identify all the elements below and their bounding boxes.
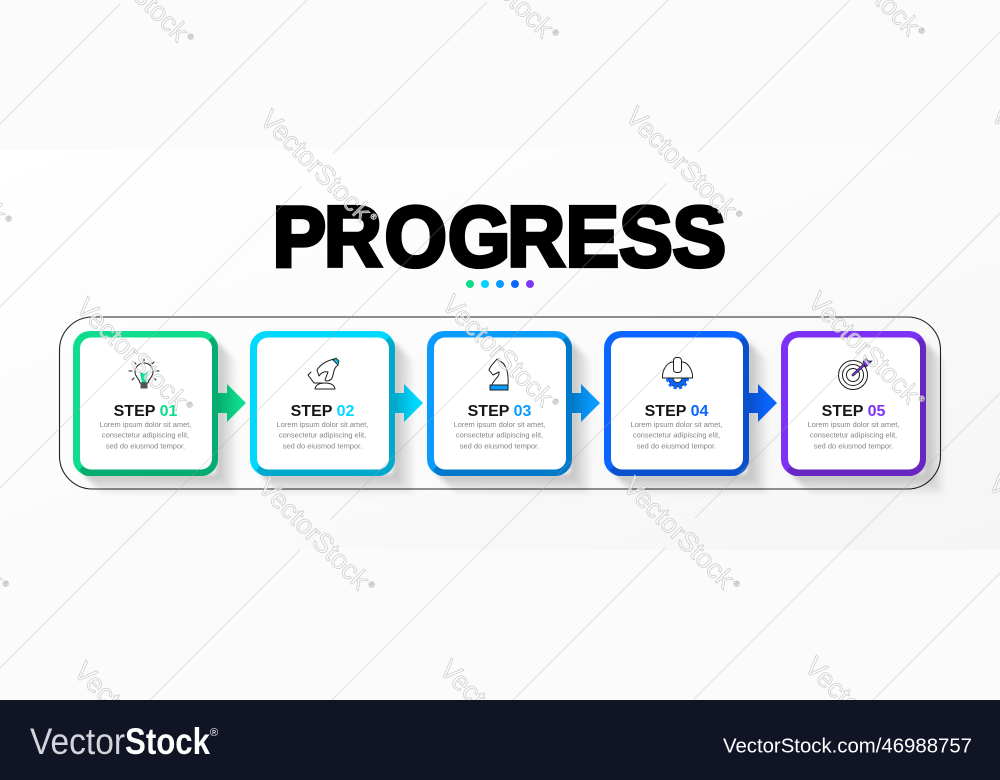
footer url: VectorStock.com/46988757 xyxy=(723,736,972,758)
watermark pattern: ® xyxy=(368,212,379,222)
icon: target with dart xyxy=(838,358,872,390)
watermark pattern: ® xyxy=(734,209,744,219)
step 4 description: sed do eiusmod tempor. xyxy=(637,441,716,450)
step 2 heading: STEP 02 xyxy=(291,403,354,420)
step 1 card xyxy=(73,331,238,496)
step 2 description: consectetur adipiscing elit, xyxy=(279,431,366,440)
step 5 heading: STEP 05 xyxy=(822,403,885,420)
footer registered mark: ® xyxy=(210,727,218,739)
watermark pattern: ® xyxy=(0,579,11,589)
watermark pattern: VectorStock xyxy=(617,471,740,594)
watermark pattern: ® xyxy=(366,580,377,590)
watermark pattern: Vector xyxy=(68,656,144,731)
title: PROGRESS xyxy=(273,189,726,285)
step 3 heading: STEP 03 xyxy=(468,403,531,420)
arrow 1 xyxy=(218,384,246,422)
step 1 heading: STEP 01 xyxy=(114,403,177,420)
watermark pattern: ® xyxy=(550,397,561,407)
watermark pattern: Vector xyxy=(799,651,874,726)
watermark pattern: ® xyxy=(916,394,927,404)
step 2 description: sed do eiusmod tempor. xyxy=(283,441,362,450)
icon: light bulb xyxy=(129,359,159,388)
step 5 description: Lorem ipsum dolor sit amet, xyxy=(808,420,899,429)
footer logo: VectorStock xyxy=(30,721,210,762)
footer bar xyxy=(0,700,1000,780)
watermark pattern: VectorStock xyxy=(620,101,743,224)
watermark pattern: VectorStock xyxy=(252,472,375,595)
step 1 description: Lorem ipsum dolor sit amet, xyxy=(100,420,191,429)
step 4 card xyxy=(604,331,769,496)
arrow 4 xyxy=(749,384,777,422)
icon: helmet and gear xyxy=(662,358,693,388)
step 2 description: Lorem ipsum dolor sit amet, xyxy=(277,420,368,429)
watermark pattern: VectorStock xyxy=(70,292,193,415)
watermark pattern: ® xyxy=(731,579,742,589)
icon: chess knight xyxy=(489,359,508,390)
title dots xyxy=(466,280,534,288)
step 1 description: sed do eiusmod tempor. xyxy=(106,441,185,450)
step 4 description: Lorem ipsum dolor sit amet, xyxy=(631,420,722,429)
watermark pattern: ® xyxy=(3,214,14,224)
watermark pattern: ® xyxy=(184,400,195,410)
step 3 description: sed do eiusmod tempor. xyxy=(460,441,539,450)
step 3 description: Lorem ipsum dolor sit amet, xyxy=(454,420,545,429)
watermark pattern: VectorStock xyxy=(436,289,559,412)
arrow 3 xyxy=(572,384,600,422)
step 3 card xyxy=(427,331,592,496)
watermark pattern: ® xyxy=(916,26,927,36)
step 5 description: sed do eiusmod tempor. xyxy=(814,441,893,450)
arrow 2 xyxy=(395,384,423,422)
step 5 description: consectetur adipiscing elit, xyxy=(810,431,897,440)
watermark pattern: ® xyxy=(550,28,561,38)
step 1 description: consectetur adipiscing elit, xyxy=(102,431,189,440)
watermark pattern: Vector xyxy=(434,654,509,729)
icon: microscope xyxy=(308,358,339,389)
step 2 card xyxy=(250,331,415,496)
frame: rounded outline around steps xyxy=(60,317,940,489)
watermark pattern: VectorStock xyxy=(802,286,925,409)
step 5 card xyxy=(781,331,946,496)
step 4 heading: STEP 04 xyxy=(645,403,708,420)
step 3 description: consectetur adipiscing elit, xyxy=(456,431,543,440)
step 4 description: consectetur adipiscing elit, xyxy=(633,431,720,440)
watermark pattern: VectorStock xyxy=(254,104,377,227)
watermark pattern: ® xyxy=(185,32,196,42)
